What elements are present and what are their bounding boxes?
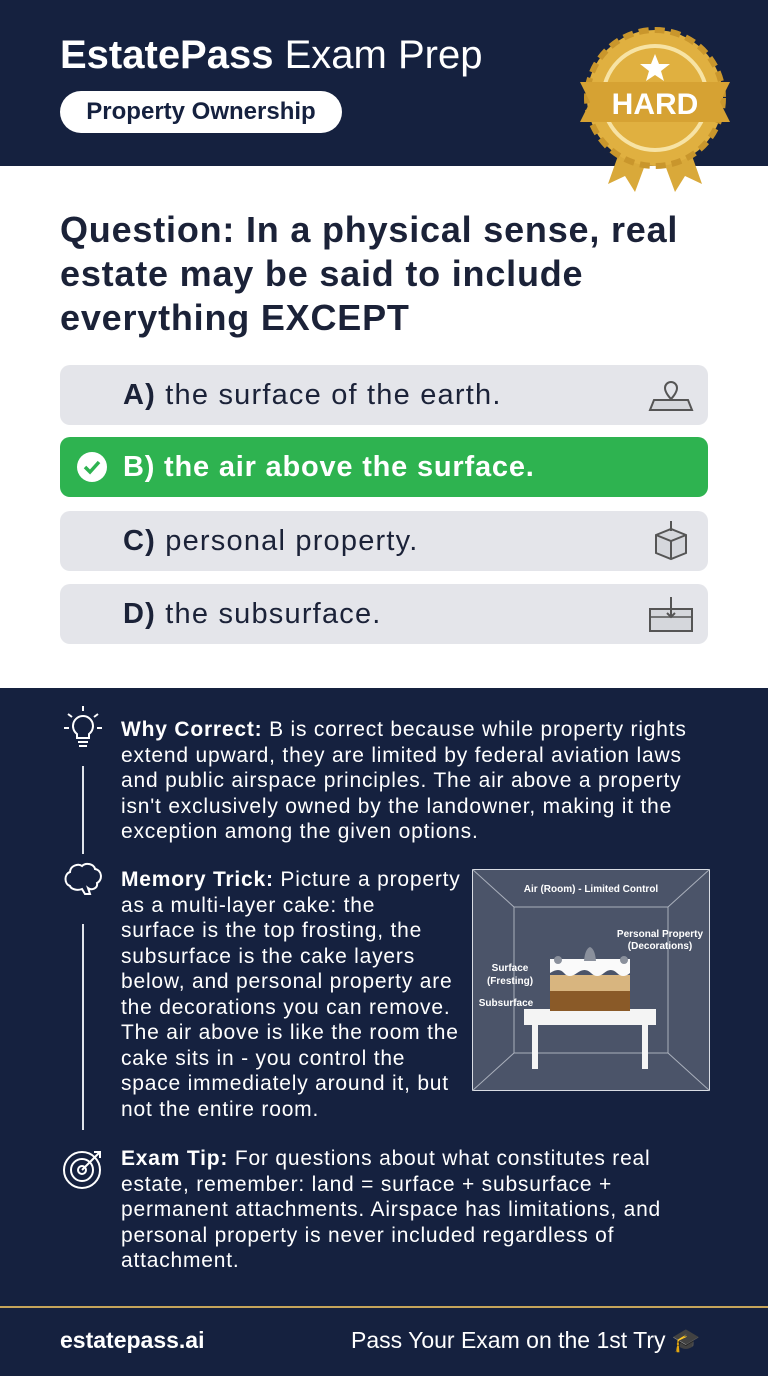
text: memory trick: below, and personal property are	[121, 970, 452, 993]
text: memory trick: the decorations you can remove.	[121, 996, 450, 1018]
category pill: Property Ownership	[86, 98, 316, 125]
text: why correct: and public airspace principles. The air above a property	[121, 769, 681, 792]
text: memory trick: Memory Trick: Picture a property	[121, 868, 461, 891]
option B (correct): B) the air above the surface.	[123, 451, 535, 483]
icon: subsurface	[649, 597, 693, 632]
text: why correct: exception among the given options.	[121, 820, 479, 843]
diagram: cake in room: Air (Room) - Limited Control	[524, 884, 658, 895]
text: memory trick: not the entire room.	[121, 1098, 319, 1120]
option A	[60, 365, 708, 425]
diagram: cake in room: (Fresting)	[487, 976, 533, 987]
text: exam tip	[121, 1147, 661, 1272]
text: exam tip: attachment.	[121, 1249, 240, 1272]
badge: HARD	[580, 27, 730, 192]
diagram: cake in room: Surface	[492, 963, 529, 974]
diagram: cake in room: Subsurface	[479, 998, 534, 1009]
text: exam tip: estate, remember: land = surface + subsurface +	[121, 1172, 612, 1196]
title: EstatePass Exam Prep	[60, 33, 482, 77]
icon: target	[63, 1151, 101, 1189]
text: why correct: Why Correct: B is correct because while property rights	[121, 718, 687, 741]
category pill	[60, 91, 342, 133]
text: why correct	[121, 718, 687, 843]
question	[60, 209, 678, 338]
question: Question: In a physical sense, real	[60, 209, 678, 250]
text: why correct: isn't exclusively owned by the landowner, making it the	[121, 794, 672, 818]
text: why correct: extend upward, they are limited by federal aviation laws	[121, 744, 682, 766]
icon: lightbulb	[64, 706, 102, 747]
icon: map pin	[648, 381, 694, 411]
option B (correct)	[60, 437, 708, 497]
option A: A) the surface of the earth.	[123, 379, 502, 411]
footer divider	[0, 1306, 768, 1308]
text: memory trick: as a multi-layer cake: the	[121, 894, 375, 916]
text: exam tip: permanent attachments. Airspace has limitations, and	[121, 1198, 661, 1221]
text: memory trick: cake sits in - you control the	[121, 1046, 405, 1070]
text: exam tip: personal property is never included regardless of	[121, 1224, 614, 1246]
diagram: cake in room: Personal Property	[617, 929, 704, 940]
text: memory trick: surface is the top frosting, the	[121, 919, 422, 942]
icon: box	[655, 521, 687, 560]
option C	[60, 511, 708, 571]
question: everything EXCEPT	[60, 297, 410, 338]
text: memory trick	[121, 868, 461, 1120]
explanation panel	[0, 688, 768, 1376]
text: exam tip: Exam Tip: For questions about what constitutes real	[121, 1147, 651, 1170]
footer: tagline: Pass Your Exam on the 1st Try 🎓	[351, 1327, 701, 1353]
header band	[0, 0, 768, 166]
option D: D) the subsurface.	[123, 598, 382, 630]
question: estate may be said to include	[60, 253, 583, 294]
text: memory trick: subsurface is the cake layers	[121, 944, 415, 968]
diagram: cake in room	[472, 869, 710, 1091]
badge: HARD: HARD	[612, 88, 698, 121]
option D	[60, 584, 708, 644]
text: memory trick: The air above is like the room the	[121, 1021, 459, 1044]
footer: site: estatepass.ai	[60, 1327, 204, 1353]
diagram: cake in room: (Decorations)	[628, 941, 692, 952]
option C: C) personal property.	[123, 525, 418, 557]
icon: check	[77, 452, 107, 482]
icon: brain	[64, 862, 102, 895]
text: memory trick: space immediately around it, but	[121, 1072, 449, 1095]
